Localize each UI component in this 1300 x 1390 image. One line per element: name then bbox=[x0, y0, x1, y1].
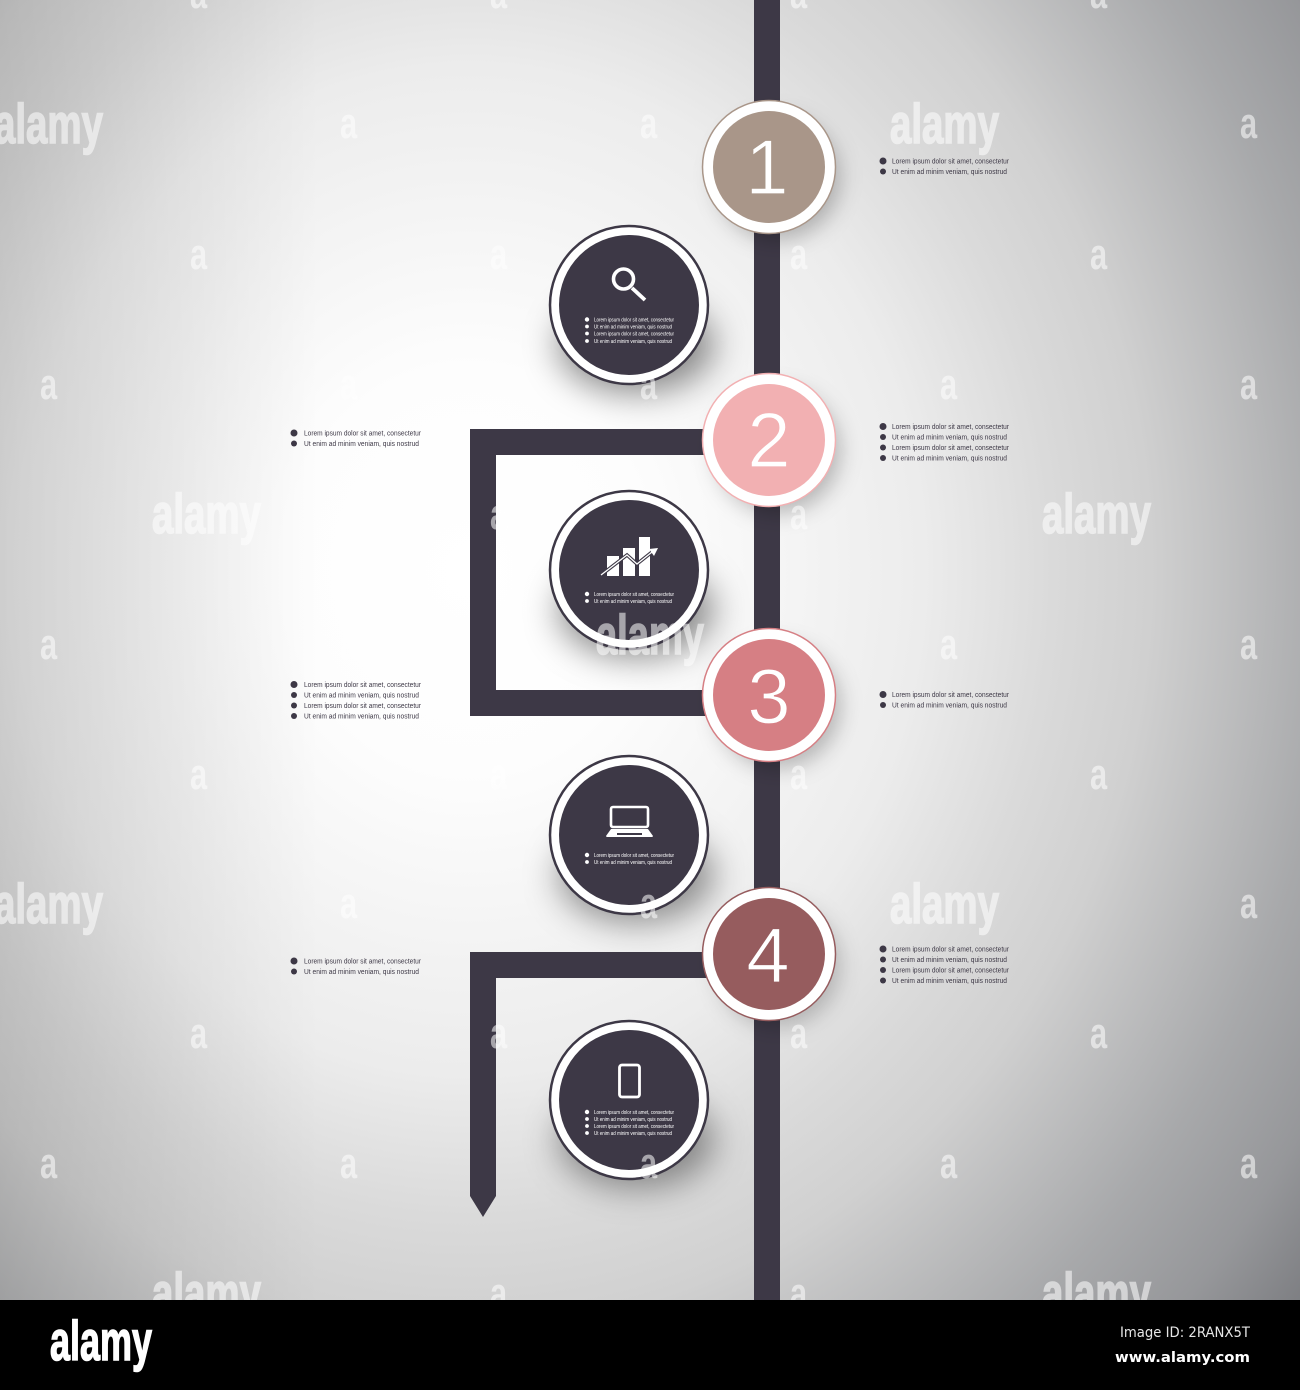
text: search bullets: Ut enim ad minim veniam, quis nostrud bbox=[594, 339, 672, 345]
watermark text: alamy bbox=[152, 482, 261, 545]
watermark text: aaa bbox=[340, 100, 1258, 148]
watermark text: alamy bbox=[1042, 482, 1151, 545]
watermark text: alamy bbox=[152, 1261, 261, 1324]
panel: laptop circle bbox=[550, 756, 714, 923]
footer logo: alamy bbox=[50, 1309, 152, 1372]
text block: step 3 notes left: Ut enim ad minim veniam, quis nostrud bbox=[304, 692, 419, 700]
watermark text: aaa bbox=[340, 880, 1258, 928]
panel: mobile circle bbox=[550, 1021, 714, 1188]
square bracket connector between steps 2 and 3 bbox=[470, 429, 710, 716]
image id: Image ID: 2RANX5T bbox=[1120, 1325, 1250, 1341]
watermark text: aaaaa bbox=[40, 361, 1258, 409]
text block: step 2 notes left: Lorem ipsum dolor sit amet, consectetur bbox=[304, 430, 422, 438]
text: mobile bullets bbox=[585, 1110, 674, 1137]
watermark text: aaaa bbox=[40, 621, 1258, 669]
text block: step 3 notes left: Ut enim ad minim veniam, quis nostrud bbox=[304, 714, 419, 720]
watermark text: aa bbox=[490, 491, 808, 539]
watermark text: aaaaa bbox=[40, 1140, 1258, 1188]
text: chart bullets: Lorem ipsum dolor sit amet, consectetur bbox=[594, 592, 674, 598]
watermark text: aaaa bbox=[190, 231, 1108, 279]
text block: step 2 notes right: Ut enim ad minim veniam, quis nostrud bbox=[892, 434, 1007, 442]
text block: step 4 notes right bbox=[880, 946, 1010, 985]
text block: step 3 notes right: Lorem ipsum dolor sit amet, consectetur bbox=[892, 692, 1010, 699]
text block: step 1 notes bbox=[880, 158, 1010, 176]
step 2 badge: 2 bbox=[747, 396, 791, 484]
text: laptop bullets: Ut enim ad minim veniam, quis nostrud bbox=[594, 860, 672, 866]
text: mobile bullets: Lorem ipsum dolor sit amet, consectetur bbox=[594, 1110, 674, 1116]
text block: step 4 notes right: Lorem ipsum dolor sit amet, consectetur bbox=[892, 968, 1010, 974]
text: chart bullets bbox=[585, 592, 674, 605]
text block: step 4 notes left: Lorem ipsum dolor sit amet, consectetur bbox=[304, 958, 422, 966]
text: search bullets: Ut enim ad minim veniam, quis nostrud bbox=[594, 324, 672, 330]
text: mobile bullets: Ut enim ad minim veniam, quis nostrud bbox=[594, 1117, 672, 1123]
footer band bbox=[0, 1300, 1300, 1390]
icon: tablet bbox=[620, 1065, 640, 1097]
text block: step 1 notes: Lorem ipsum dolor sit amet, consectetur bbox=[892, 158, 1010, 166]
text: mobile bullets: Lorem ipsum dolor sit amet, consectetur bbox=[594, 1124, 674, 1130]
text block: step 2 notes right: Lorem ipsum dolor sit amet, consectetur bbox=[892, 445, 1010, 452]
watermark text: alamy bbox=[890, 92, 999, 155]
step 2 badge bbox=[702, 374, 840, 513]
text block: step 3 notes right: Ut enim ad minim veniam, quis nostrud bbox=[892, 702, 1007, 710]
watermark text: alamy bbox=[596, 603, 704, 666]
text block: step 4 notes right: Ut enim ad minim veniam, quis nostrud bbox=[892, 957, 1007, 964]
watermark text: aa bbox=[490, 1270, 808, 1318]
text: laptop bullets: Lorem ipsum dolor sit amet, consectetur bbox=[594, 853, 674, 859]
arrow connector from step 4 bbox=[470, 952, 710, 1217]
text: chart bullets: Ut enim ad minim veniam, quis nostrud bbox=[594, 599, 672, 605]
panel: chart circle bbox=[550, 491, 714, 658]
text block: step 3 notes left: Lorem ipsum dolor sit amet, consectetur bbox=[304, 703, 422, 710]
text: mobile bullets: Ut enim ad minim veniam, quis nostrud bbox=[594, 1131, 672, 1137]
website: www.alamy.com bbox=[1115, 1350, 1250, 1366]
step 1 badge: 1 bbox=[745, 123, 789, 211]
text block: step 2 notes right: Ut enim ad minim veniam, quis nostrud bbox=[892, 456, 1007, 462]
text: search bullets bbox=[585, 317, 674, 345]
text: search bullets: Lorem ipsum dolor sit amet, consectetur bbox=[594, 332, 674, 338]
step 3 badge: 3 bbox=[747, 652, 791, 740]
watermark text: aaaa bbox=[190, 751, 1108, 799]
text block: step 4 notes right: Ut enim ad minim veniam, quis nostrud bbox=[892, 978, 1007, 985]
watermark text: aaaa bbox=[190, 1010, 1108, 1058]
text block: step 4 notes right: Lorem ipsum dolor sit amet, consectetur bbox=[892, 946, 1010, 954]
text: search bullets: Lorem ipsum dolor sit amet, consectetur bbox=[594, 318, 674, 324]
panel: search circle bbox=[550, 226, 714, 393]
text block: step 3 notes left bbox=[290, 681, 422, 720]
text block: step 2 notes left: Ut enim ad minim veniam, quis nostrud bbox=[304, 441, 419, 448]
text block: step 2 notes right bbox=[880, 423, 1010, 462]
text block: step 4 notes left bbox=[290, 958, 422, 976]
text: laptop bullets bbox=[585, 853, 674, 866]
text block: step 3 notes right bbox=[880, 691, 1010, 710]
watermark text: alamy bbox=[1042, 1261, 1151, 1324]
text block: step 2 notes right: Lorem ipsum dolor sit amet, consectetur bbox=[892, 424, 1010, 431]
text block: step 4 notes left: Ut enim ad minim veniam, quis nostrud bbox=[304, 969, 419, 976]
text block: step 1 notes: Ut enim ad minim veniam, quis nostrud bbox=[892, 169, 1007, 176]
icon: growth chart bbox=[601, 537, 658, 576]
step 3 badge bbox=[702, 628, 840, 768]
watermark text: alamy bbox=[890, 872, 999, 935]
icon: laptop bbox=[606, 807, 653, 837]
icon: magnifying glass bbox=[614, 269, 645, 300]
step 4 badge bbox=[702, 888, 840, 1027]
text block: step 3 notes left: Lorem ipsum dolor sit amet, consectetur bbox=[304, 682, 422, 689]
main vertical timeline line bbox=[754, 0, 780, 1300]
step 1 badge bbox=[702, 100, 840, 240]
step 4 badge: 4 bbox=[746, 911, 790, 999]
text block: step 2 notes left bbox=[290, 430, 422, 448]
